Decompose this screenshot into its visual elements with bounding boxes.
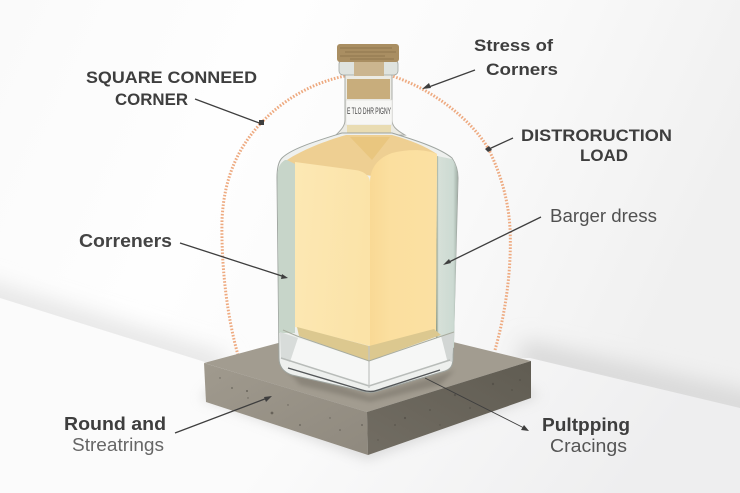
bottle body glass bbox=[277, 133, 458, 392]
label: stress of corners bbox=[474, 36, 558, 79]
arrow: correners bbox=[180, 243, 288, 279]
concrete speckles bbox=[219, 377, 521, 441]
label: barger dress: Barger dress bbox=[550, 206, 657, 226]
label: square conneed corner bbox=[86, 68, 257, 109]
liquid base band bbox=[297, 327, 441, 361]
bottle shadow on plinth bbox=[285, 368, 455, 402]
floor bbox=[0, 298, 740, 493]
liquid right panel bbox=[370, 150, 437, 346]
label: square conneed corner: SQUARE CONNEED bbox=[86, 68, 257, 87]
clear glass base bbox=[280, 330, 454, 392]
label: distroruction load: LOAD bbox=[580, 146, 628, 165]
liquid left panel bbox=[295, 162, 370, 346]
concrete plinth bbox=[204, 322, 531, 455]
label: pultpping cracings: Pultpping bbox=[542, 415, 630, 435]
label: pultpping cracings: Cracings bbox=[550, 436, 627, 456]
wooden cap bbox=[337, 44, 399, 62]
label: round and streatrings: Streatrings bbox=[72, 435, 164, 455]
label: round and streatrings bbox=[64, 414, 166, 455]
arrow: barger dress bbox=[443, 217, 541, 265]
glass collar bbox=[339, 60, 398, 75]
label: correners: Correners bbox=[79, 231, 172, 251]
dotted stress arc bbox=[222, 76, 510, 355]
bottle neck bbox=[335, 74, 405, 136]
arrow: round and streatrings bbox=[175, 396, 272, 433]
label: square conneed corner: CORNER bbox=[115, 90, 188, 109]
arrow: distroruction load bbox=[485, 138, 513, 152]
arrow: square corner bbox=[195, 99, 264, 125]
bottle bbox=[277, 44, 458, 392]
label: distroruction load: DISTRORUCTION bbox=[521, 126, 672, 145]
arrow: pultpping cracings bbox=[425, 378, 529, 431]
label: pultpping cracings bbox=[542, 415, 630, 456]
shoulder liquid bbox=[287, 135, 437, 176]
neck label: E TLO DHR PIGNY bbox=[347, 106, 391, 116]
neck label bbox=[346, 100, 392, 125]
side glass panels bbox=[278, 160, 295, 333]
block shadow bbox=[200, 370, 540, 460]
cork inside neck bbox=[347, 79, 390, 99]
label: distroruction load bbox=[521, 126, 672, 165]
arrow: stress of corners bbox=[422, 70, 475, 89]
label: round and streatrings: Round and bbox=[64, 414, 166, 434]
label: stress of corners: Stress of bbox=[474, 36, 553, 55]
wall shading near floor bbox=[0, 286, 740, 414]
label: stress of corners: Corners bbox=[486, 60, 558, 79]
